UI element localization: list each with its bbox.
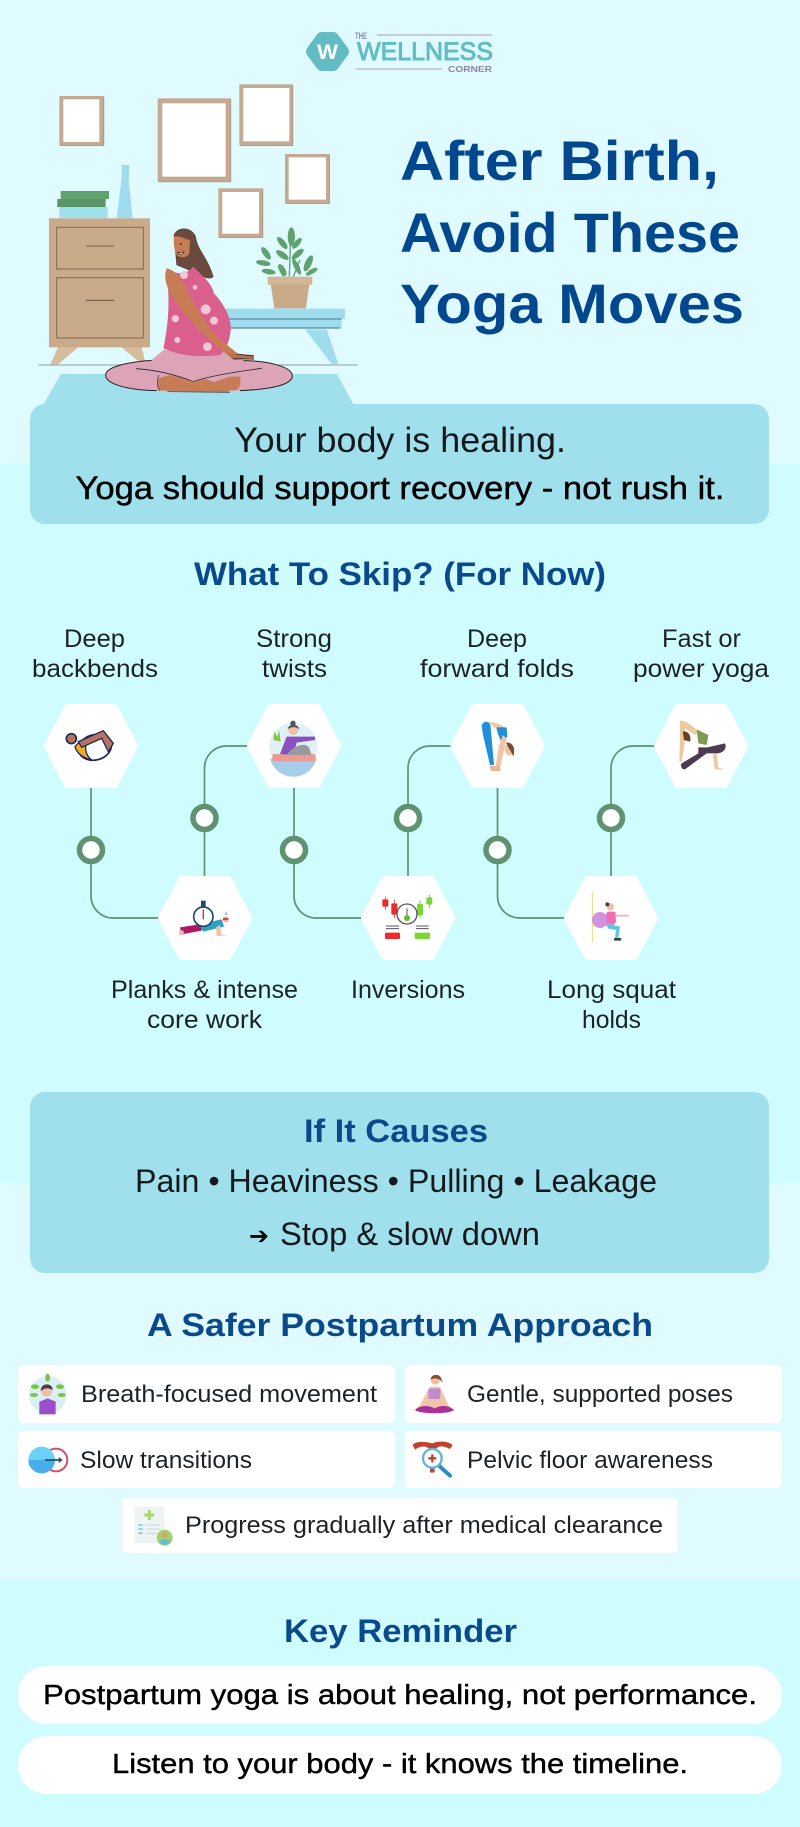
label: deep backbends: backbends [32, 655, 158, 683]
title: After Birth, [400, 129, 719, 192]
label: planks and intense core work: Planks & intense [111, 976, 298, 1004]
illustration: woman seated in a room [38, 84, 358, 392]
hexagon: fast or power yoga icon [658, 708, 744, 784]
logo: The Wellness Corner [312, 31, 493, 74]
hexagon: inversions icon [365, 880, 451, 956]
card: progress gradually [122, 1498, 678, 1553]
chart: connector lines between poses [80, 746, 656, 918]
title: Avoid These [400, 201, 740, 264]
card: pelvic floor awareness: Pelvic floor awareness [467, 1447, 713, 1474]
label: deep backbends [32, 625, 158, 683]
icon: pelvic magnifier [413, 1442, 453, 1476]
woman [106, 229, 292, 392]
panel: if it causes [30, 1092, 769, 1273]
icon: breathing woman [29, 1374, 67, 1414]
label: fast or power yoga: power yoga [633, 655, 769, 683]
pill: listen to your body [18, 1736, 782, 1794]
hexagon: strong twists icon [251, 708, 337, 784]
card: gentle supported poses: Gentle, supported poses [467, 1381, 733, 1408]
label: deep forward folds: forward folds [420, 655, 574, 683]
label: strong twists: twists [262, 655, 327, 683]
logo: The Wellness Corner: W [317, 41, 338, 64]
title: Yoga Moves [400, 272, 744, 335]
pill: healing not performance [18, 1666, 782, 1724]
panel: if it causes: ➔ [249, 1222, 269, 1250]
pill: listen to your body: Listen to your body - it knows the timeline. [112, 1748, 688, 1779]
side table [222, 309, 345, 364]
panel: if it causes: Pain • Heaviness • Pulling • Leakage [135, 1163, 657, 1199]
icon: meditating woman [415, 1375, 454, 1413]
label: fast or power yoga: Fast or [662, 625, 741, 653]
label: long squat holds: holds [582, 1006, 641, 1034]
label: inversions: Inversions [351, 976, 465, 1004]
card: pelvic floor awareness [405, 1431, 782, 1488]
icon: medical clearance [134, 1507, 173, 1546]
cabinet [49, 218, 150, 365]
panel: your body is healing: Yoga should support recovery - not rush it. [76, 470, 724, 506]
logo: The Wellness Corner: CORNER [448, 64, 492, 74]
potted plant [256, 227, 319, 308]
hexagon: deep backbends icon [48, 708, 134, 784]
label: strong twists: Strong [256, 625, 332, 653]
title [400, 129, 744, 335]
label: planks and intense core work [111, 976, 298, 1034]
card: breath-focused movement: Breath-focused movement [81, 1381, 377, 1408]
card: gentle supported poses [405, 1365, 782, 1423]
pill: healing not performance: Postpartum yoga is about healing, not performance. [43, 1679, 757, 1710]
label: long squat holds [547, 976, 676, 1034]
label: deep backbends: Deep [64, 625, 125, 653]
label: planks and intense core work: core work [147, 1006, 263, 1034]
label: strong twists [256, 625, 332, 683]
label: fast or power yoga [633, 625, 769, 683]
panel: if it causes: If It Causes [304, 1113, 488, 1149]
label: deep forward folds [420, 625, 574, 683]
card: progress gradually: Progress gradually after medical clearance [185, 1512, 663, 1539]
panel: if it causes: Stop & slow down [280, 1216, 540, 1252]
heading: a safer postpartum approach: A Safer Postpartum Approach [147, 1307, 653, 1343]
heading: what to skip: What To Skip? (For Now) [194, 556, 606, 592]
heading: key reminder: Key Reminder [284, 1613, 517, 1649]
panel: your body is healing: Your body is healing. [234, 421, 566, 460]
hexagon: deep forward folds icon [454, 708, 540, 784]
card: slow transitions: Slow transitions [80, 1447, 252, 1474]
label: deep forward folds: Deep [467, 625, 527, 653]
logo: The Wellness Corner: THE [355, 31, 367, 41]
icon: transition arrow [28, 1447, 67, 1473]
books and vase [57, 165, 133, 218]
floor line [38, 363, 358, 367]
panel: your body is healing [30, 404, 769, 524]
hexagon: long squat holds icon [568, 880, 654, 956]
logo: The Wellness Corner: WELLNESS [357, 38, 493, 66]
floor mat [43, 374, 354, 405]
card: breath-focused movement [18, 1365, 395, 1423]
picture frames [59, 84, 330, 238]
card: slow transitions [18, 1431, 395, 1488]
hexagon: planks icon [162, 880, 248, 956]
label: long squat holds: Long squat [547, 976, 676, 1004]
